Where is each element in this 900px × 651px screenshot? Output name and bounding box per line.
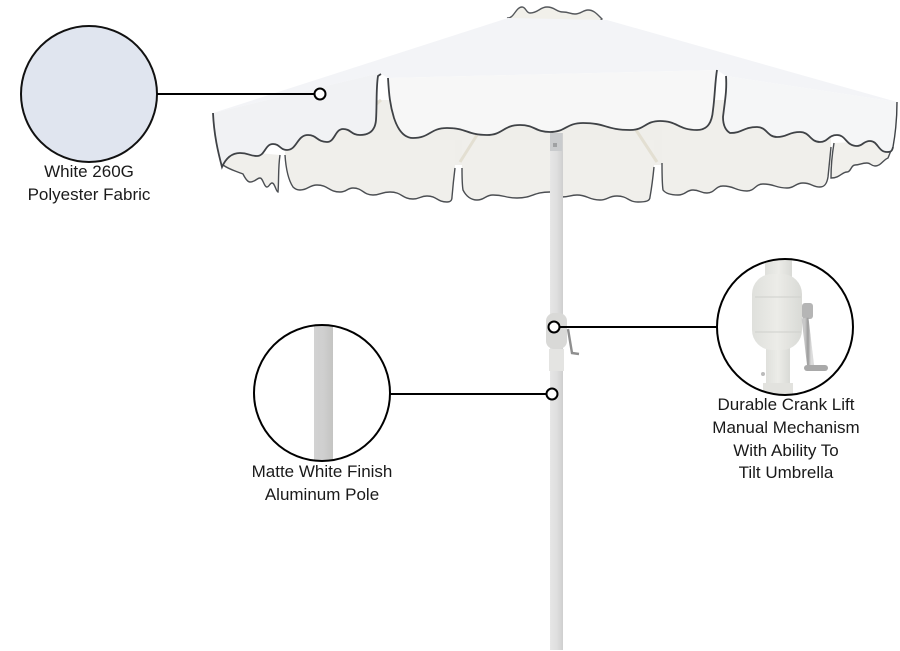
center front valance bbox=[462, 140, 654, 202]
finial ruffle bbox=[508, 7, 602, 30]
fabric label: White 260G bbox=[44, 162, 134, 181]
pole circle outline bbox=[254, 325, 390, 461]
callout: crank mechanism bbox=[548, 255, 860, 482]
canopy ribs bbox=[372, 100, 657, 162]
crank label: Tilt Umbrella bbox=[739, 463, 834, 482]
crank leader line bbox=[560, 326, 717, 328]
umbrella canopy top bbox=[213, 18, 897, 167]
crank circle outline bbox=[717, 259, 853, 395]
umbrella crank housing on pole bbox=[546, 313, 579, 371]
crank detail image bbox=[752, 260, 828, 394]
umbrella pole bbox=[550, 133, 563, 650]
center canopy panel bbox=[388, 70, 717, 138]
right canopy panel bbox=[723, 76, 897, 152]
callout: pole finish bbox=[252, 325, 558, 504]
crank label: With Ability To bbox=[733, 441, 839, 460]
crank marker dot bbox=[548, 322, 560, 332]
fabric leader line bbox=[157, 93, 315, 95]
right small valance bbox=[831, 140, 892, 178]
pole label: Matte White Finish bbox=[252, 462, 392, 481]
fabric detail circle bbox=[21, 26, 157, 162]
fabric label: Polyester Fabric bbox=[28, 185, 151, 204]
underside of canopy bbox=[285, 100, 831, 165]
left small valance bbox=[223, 150, 280, 192]
pole detail image bbox=[314, 326, 333, 460]
pole marker dot bbox=[546, 388, 558, 400]
top canopy fabric bbox=[213, 18, 897, 113]
crank label: Manual Mechanism bbox=[712, 418, 860, 437]
fabric marker dot bbox=[314, 88, 326, 100]
pole leader line bbox=[390, 393, 546, 395]
crank label: Durable Crank Lift bbox=[717, 395, 855, 414]
right front valance bbox=[662, 120, 831, 195]
left front valance bbox=[285, 140, 455, 202]
left canopy panel bbox=[213, 73, 380, 167]
right canopy edge bbox=[893, 102, 897, 147]
pole label: Aluminum Pole bbox=[265, 485, 379, 504]
callout: fabric bbox=[21, 26, 326, 204]
umbrella canopy underside and valances bbox=[223, 7, 892, 202]
